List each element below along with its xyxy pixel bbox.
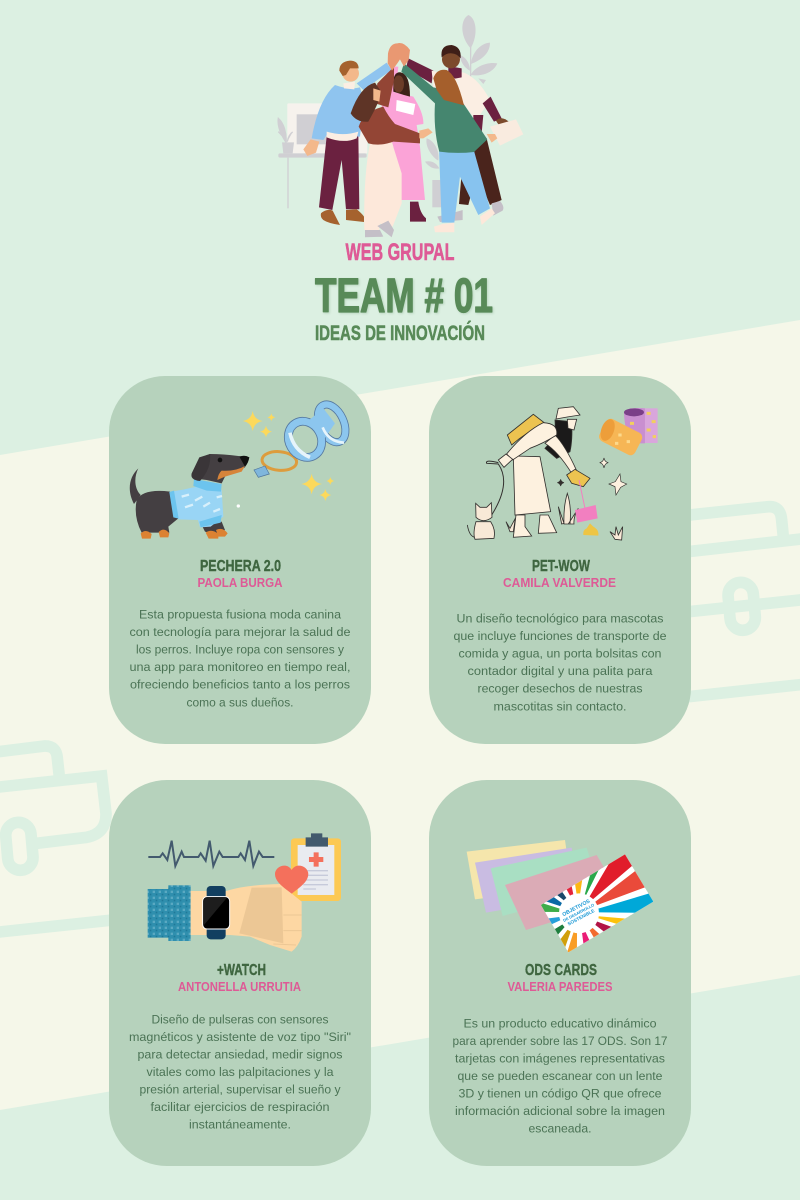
collar (254, 450, 297, 477)
body text: 3D y tienen un código QR que ofrece (458, 1086, 662, 1100)
dog (130, 454, 249, 539)
stars (557, 458, 627, 495)
body text: facilitar ejercicios de respiración (150, 1100, 330, 1114)
author: PAOLA BURGA (198, 576, 282, 590)
pink bag and waste (575, 480, 598, 536)
pastel cards (467, 840, 623, 930)
illustration: woman walking cat (467, 407, 658, 540)
sdg card (541, 854, 654, 952)
background briefcase left (0, 746, 113, 933)
author: CAMILA VALVERDE (503, 576, 616, 590)
body text: mascotitas sin contacto. (494, 699, 626, 713)
body text: una app para monitoreo en tiempo real, (130, 660, 350, 674)
body text: ofreciendo beneficios tanto a los perros (130, 678, 350, 692)
body text: para detectar ansiedad, medir signos (138, 1047, 342, 1061)
illustration: smart watch on wrist (148, 833, 341, 952)
body text: Es un producto educativo dinámico (464, 1016, 657, 1030)
author: VALERIA PAREDES (508, 980, 612, 994)
body text: información adicional sobre la imagen (455, 1104, 665, 1118)
body text: presión arterial, supervisar el sueño y (140, 1082, 341, 1096)
cat (467, 503, 495, 539)
raised hands (388, 43, 410, 71)
woman (498, 407, 590, 537)
sdg badge text (560, 898, 598, 928)
body text: los perros. Incluye ropa con sensores y (136, 642, 345, 656)
sleeve (148, 885, 191, 941)
body text: Un diseño tecnológico para mascotas (456, 611, 664, 625)
diagonal cream band (0, 320, 800, 1110)
person: woman in green (401, 63, 497, 232)
illustration: team high five (278, 15, 523, 237)
author: ANTONELLA URRUTIA (178, 980, 301, 994)
body text (129, 1012, 351, 1131)
title: PECHERA 2.0 (200, 558, 281, 575)
body text (452, 1016, 668, 1135)
body text: que se pueden escanear con un lente (458, 1069, 663, 1083)
harness (282, 400, 351, 463)
sdg badge text: DE DESARROLLO (562, 902, 595, 923)
grass (506, 493, 623, 540)
body text: contador digital y una palita para (468, 664, 653, 678)
body text (130, 607, 351, 709)
title: PET-WOW (532, 558, 591, 575)
person: man left (303, 61, 392, 225)
plant behind team (425, 15, 497, 207)
body text: para aprender sobre las 17 ODS. Son 17 (452, 1034, 668, 1048)
body text: con tecnología para mejorar la salud de (130, 625, 351, 639)
person: woman in brown (351, 67, 433, 237)
sdg badge text: OBJETIVOS (561, 898, 592, 918)
panel: ods cards (429, 780, 691, 1166)
body text: Diseño de pulseras con sensores (152, 1012, 328, 1026)
body text: como a sus dueños. (186, 695, 294, 709)
body text (454, 611, 667, 713)
body text: tarjetas con imágenes representativas (455, 1051, 665, 1065)
title: ODS CARDS (525, 962, 597, 979)
person: woman in pink (380, 67, 426, 222)
body text: vitales como las palpitaciones y la (146, 1065, 334, 1079)
hand (191, 884, 302, 952)
body text: comida y agua, un porta bolsitas con (458, 646, 662, 660)
title: team 01: TEAM # 01 (315, 270, 493, 323)
body text: magnéticos y asistente de voz tipo "Siri" (129, 1030, 351, 1044)
sdg badge text: SOSTENIBLE (567, 908, 595, 926)
watch (203, 886, 230, 939)
panel: pechera 2.0 (109, 376, 371, 744)
body text: instantáneamente. (189, 1117, 291, 1131)
clipboard (291, 833, 341, 901)
heartbeat line (148, 841, 274, 866)
body text: escaneada. (528, 1121, 592, 1135)
title: +WATCH (217, 962, 266, 979)
body text: Esta propuesta fusiona moda canina (139, 607, 341, 621)
subtitle: ideas de innovacion: IDEAS DE INNOVACIÓN (315, 321, 485, 345)
desk with monitor (278, 103, 367, 208)
background briefcase right (673, 507, 800, 698)
illustration: sdg cards (466, 840, 654, 952)
sparkles (243, 411, 334, 501)
body text: recoger desechos de nuestras (478, 682, 642, 696)
heart (275, 866, 308, 894)
illustration: dachshund and harness (130, 400, 351, 539)
body text: que incluye funciones de transporte de (454, 629, 667, 643)
heading: web grupal: WEB GRUPAL (346, 239, 454, 266)
panel: +watch (109, 780, 371, 1166)
leash (486, 461, 504, 515)
bag rolls (597, 408, 658, 457)
panel: pet-wow (429, 376, 691, 744)
person: man right (406, 45, 523, 222)
